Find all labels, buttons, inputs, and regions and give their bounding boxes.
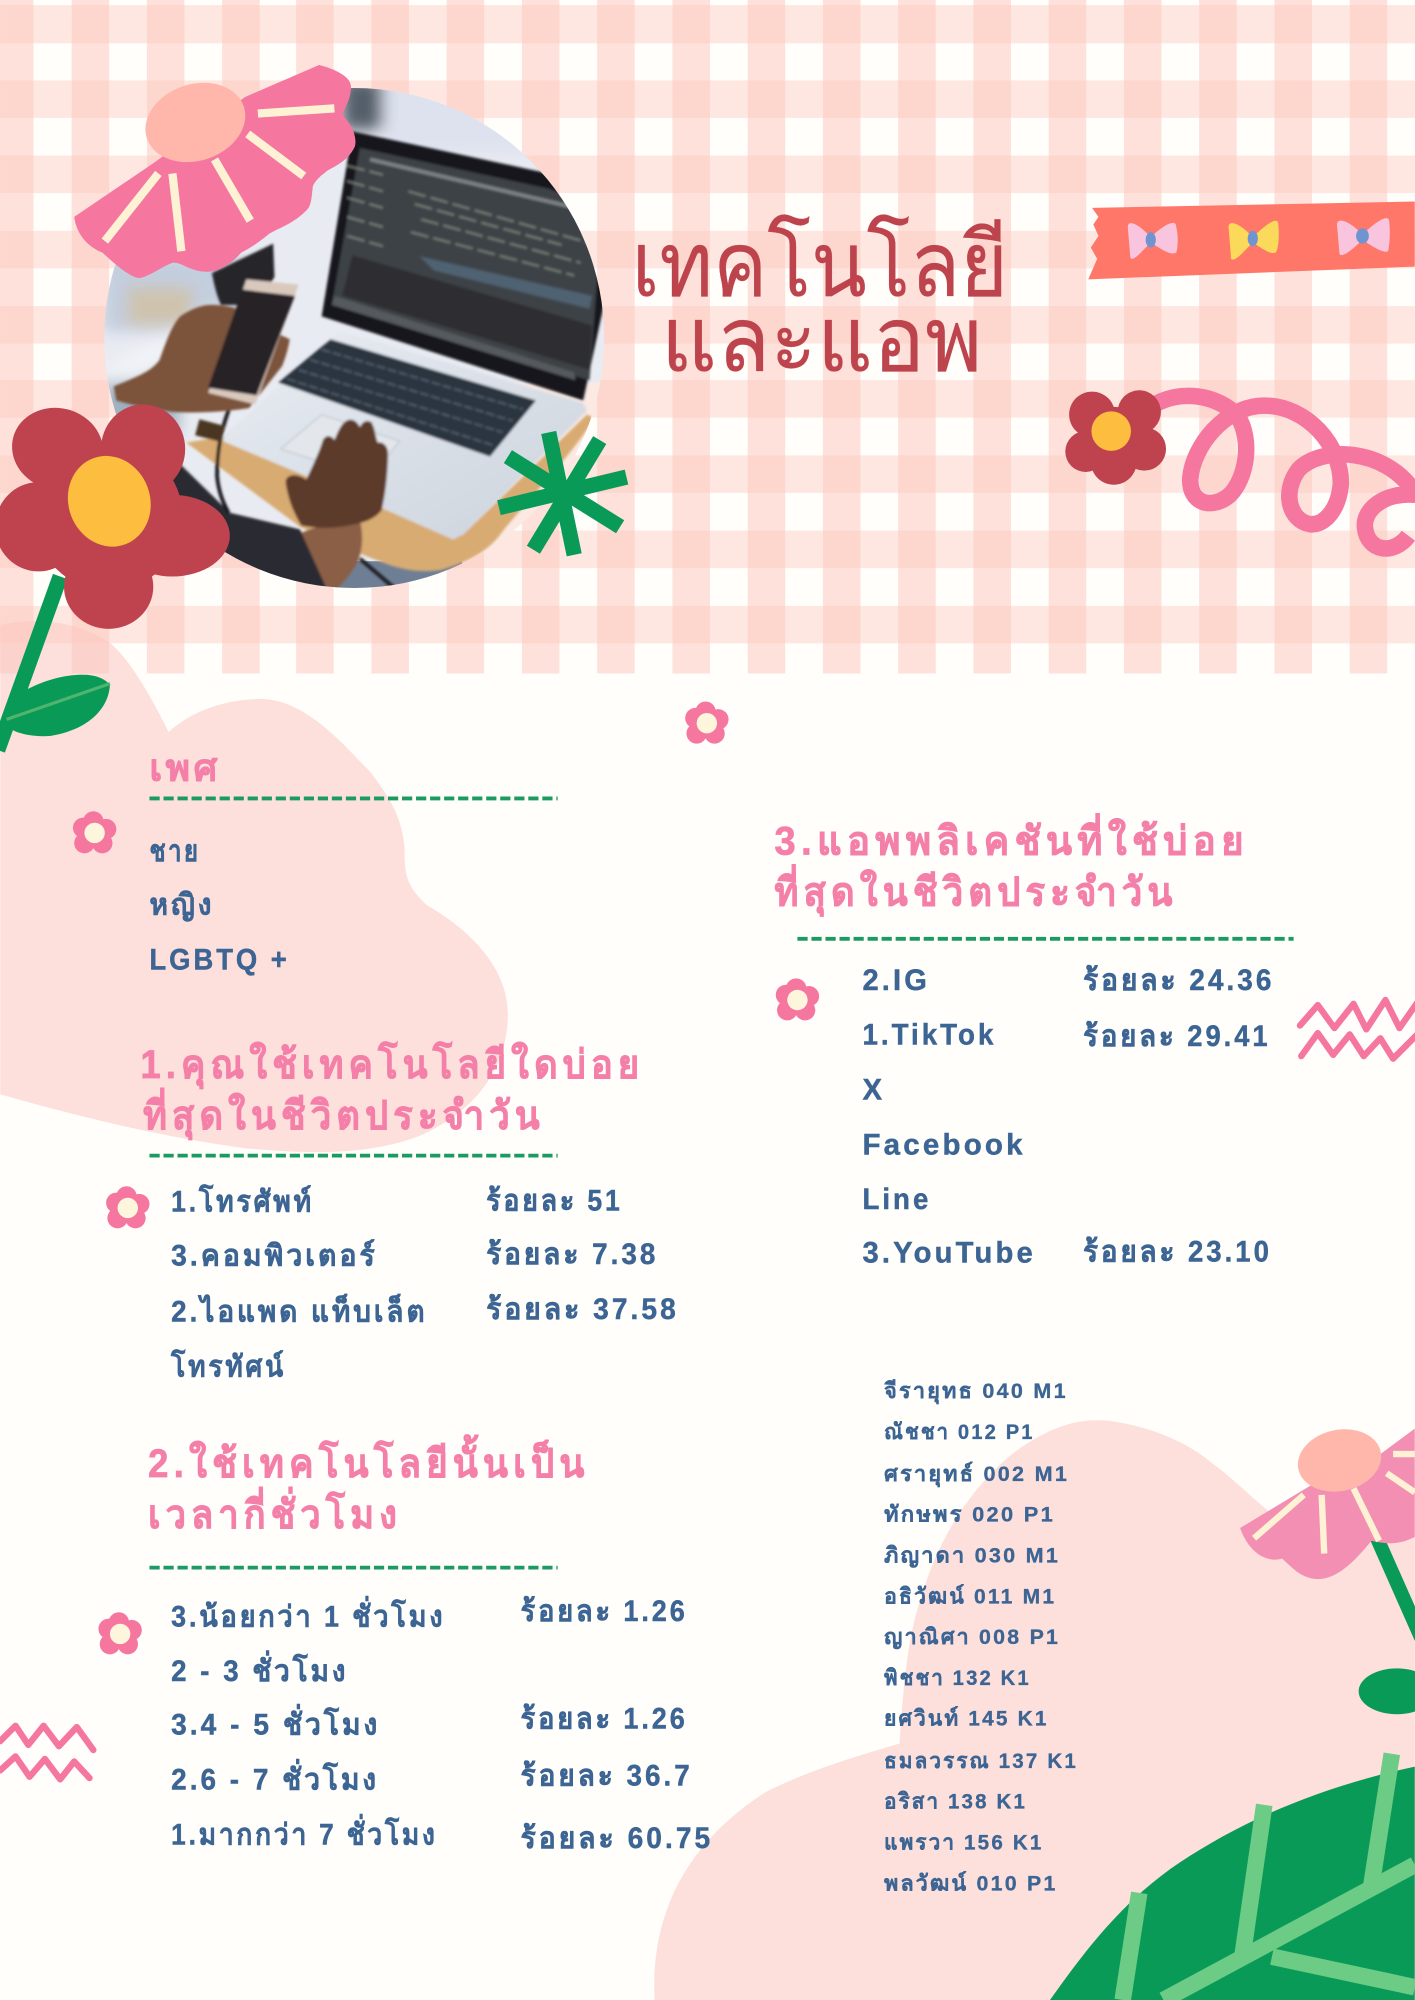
text block: question 1 answers: 3.คอมพิวเตอร์ xyxy=(171,1238,378,1272)
text block: student names: ธมลวรรณ 137 K1 xyxy=(884,1748,1078,1773)
text block: student names: ยศวินท์ 145 K1 xyxy=(884,1706,1049,1731)
petals xyxy=(1240,1429,1415,1579)
text block: question 2 answers: ร้อยละ 36.7 xyxy=(521,1760,693,1793)
heading: question 1 xyxy=(141,1041,644,1140)
bow 3 xyxy=(1337,218,1390,255)
text block: student names: จีรายุทธ 040 M1 xyxy=(884,1378,1068,1405)
heading: question 3: 3.แอพพลิเคชันที่ใช้บ่อย xyxy=(774,813,1249,864)
icon: pink squiggle xyxy=(1151,396,1415,548)
bow 1 xyxy=(1128,223,1178,259)
leaf xyxy=(1359,1668,1415,1714)
heading: question 2: 2.ใช้เทคโนโลยีนั้นเป็น xyxy=(148,1434,590,1486)
cup xyxy=(212,244,274,305)
text block: question 2 answers: ร้อยละ 1.26 xyxy=(521,1702,688,1735)
text block: question 1 answers: ร้อยละ 7.38 xyxy=(486,1238,658,1271)
text block: question 1 answers: 1.โทรศัพท์ xyxy=(171,1184,314,1219)
text block: question 1 answers xyxy=(170,1184,679,1383)
text block: question 3 answers: ร้อยละ 23.10 xyxy=(1083,1235,1272,1268)
heading: question 3 xyxy=(774,813,1249,917)
text block: question 3 answers: ร้อยละ 24.36 xyxy=(1083,964,1274,997)
text block: student names: แพรวา 156 K1 xyxy=(884,1829,1044,1854)
laptop base xyxy=(223,330,587,540)
text block: gender list: ชาย xyxy=(149,835,200,868)
text block: question 3 answers: Facebook xyxy=(862,1128,1026,1161)
text block: question 3 answers: X xyxy=(862,1073,885,1106)
icon: large green leaf xyxy=(1050,1754,1415,2000)
text block: question 1 answers: 2.ไอแพด แท็บเล็ต xyxy=(171,1293,428,1328)
icon: large red flower with stem xyxy=(0,398,230,750)
blob: lower-right pink background shape xyxy=(654,1420,1415,2000)
washi tape with bows xyxy=(1088,202,1415,279)
heading: question 1: 1.คุณใช้เทคโนโลยีใดบ่อย xyxy=(141,1041,644,1089)
text block: question 1 answers: ร้อยละ 51 xyxy=(486,1184,623,1217)
divider: question 3 xyxy=(797,937,1294,940)
phone cable xyxy=(217,407,230,513)
trackpad xyxy=(280,414,400,460)
divider: question 2 xyxy=(149,1566,558,1569)
text block: student names xyxy=(884,1378,1078,1895)
icon: small flower gender xyxy=(73,811,116,853)
title line 2: และแอพ xyxy=(661,290,982,391)
text block: question 3 answers: 3.YouTube xyxy=(862,1237,1036,1270)
icon: small red flower xyxy=(1065,390,1166,485)
text block: question 3 answers: ร้อยละ 29.41 xyxy=(1083,1020,1271,1053)
text block: student names: ภิญาดา 030 M1 xyxy=(884,1542,1060,1568)
text block: student names: พลวัฒน์ 010 P1 xyxy=(884,1870,1058,1895)
text block: student names: พิชชา 132 K1 xyxy=(884,1665,1031,1690)
flower center xyxy=(55,444,163,558)
text block: student names: อธิวัฒน์ 011 M1 xyxy=(884,1583,1056,1608)
text block: question 2 answers: 3.4 - 5 ชั่วโมง xyxy=(171,1704,380,1742)
heading: question 1: ที่สุดในชีวิตประจำวัน xyxy=(143,1087,545,1140)
icon: green asterisk xyxy=(499,432,627,555)
flower center xyxy=(1292,1422,1387,1499)
photo: laptop and phone in circle xyxy=(102,77,612,599)
text block: gender list: หญิง xyxy=(149,889,215,923)
divider: gender xyxy=(149,797,558,800)
heading: question 2 xyxy=(148,1434,590,1537)
leaf xyxy=(8,675,110,736)
title: เทคโนโลยี xyxy=(632,215,1008,316)
heading: question 3: ที่สุดในชีวิตประจำวัน xyxy=(774,864,1178,917)
phone xyxy=(208,279,299,404)
text block: question 1 answers: ร้อยละ 37.58 xyxy=(486,1293,679,1326)
text block: question 3 answers: Line xyxy=(862,1183,931,1216)
text block: question 2 answers: 1.มากกว่า 7 ชั่วโมง xyxy=(171,1813,438,1851)
icon: zigzag right xyxy=(1300,1000,1415,1059)
icon: pink flower top-left xyxy=(74,65,355,278)
text block: question 2 answers xyxy=(171,1595,713,1855)
text block: question 2 answers: 3.น้อยกว่า 1 ชั่วโมง xyxy=(171,1595,445,1633)
text block: gender list: LGBTQ + xyxy=(149,943,290,976)
heading: gender: เพศ xyxy=(149,748,226,789)
gingham pattern header xyxy=(0,0,1415,673)
leaf veins xyxy=(1123,1754,1415,2000)
sleeve xyxy=(173,464,327,586)
text block: question 3 answers xyxy=(862,964,1274,1270)
title xyxy=(632,215,1008,391)
phone hand xyxy=(114,305,290,412)
icon: small flower question 2 xyxy=(98,1612,142,1654)
stem xyxy=(1377,1537,1415,1638)
text block: gender list xyxy=(149,835,290,976)
table xyxy=(186,415,595,571)
flower center xyxy=(135,70,256,175)
petal strokes xyxy=(1254,1454,1415,1554)
text block: student names: ญาณิศา 008 P1 xyxy=(884,1624,1060,1650)
text block: question 2 answers: 2.6 - 7 ชั่วโมง xyxy=(171,1759,379,1797)
blob: upper-left pink background shape xyxy=(0,621,508,1152)
keyboard xyxy=(278,339,536,457)
text block: question 3 answers: 2.IG xyxy=(862,964,930,997)
divider: question 1 xyxy=(149,1154,558,1157)
text block: student names: อริสา 138 K1 xyxy=(884,1789,1027,1814)
text block: student names: ศรายุทธ์ 002 M1 xyxy=(884,1461,1069,1488)
laptop lid xyxy=(322,131,606,401)
text block: question 2 answers: ร้อยละ 60.75 xyxy=(521,1822,713,1855)
petal strokes xyxy=(105,108,334,251)
icon: small pink flower at top middle xyxy=(685,702,729,744)
icon: pink flower bottom-right with stem xyxy=(1240,1422,1415,1714)
text block: student names: ณัชชา 012 P1 xyxy=(884,1419,1035,1444)
text block: question 2 answers: ร้อยละ 1.26 xyxy=(521,1595,688,1628)
text block: question 3 answers: 1.TikTok xyxy=(862,1019,996,1052)
typing hand xyxy=(286,420,388,528)
icon: zigzag left xyxy=(0,1726,93,1779)
text block: question 2 answers: 2 - 3 ชั่วโมง xyxy=(171,1650,348,1688)
text block: question 1 answers: โทรทัศน์ xyxy=(170,1348,286,1383)
bow 2 xyxy=(1229,221,1279,260)
arm xyxy=(300,521,364,588)
heading: question 2: เวลากี่ชั่วโมง xyxy=(148,1486,402,1537)
text block: student names: ทักษพร 020 P1 xyxy=(884,1502,1055,1527)
icon: small flower question 3 xyxy=(776,978,819,1020)
icon: small flower question 1 xyxy=(106,1186,149,1228)
